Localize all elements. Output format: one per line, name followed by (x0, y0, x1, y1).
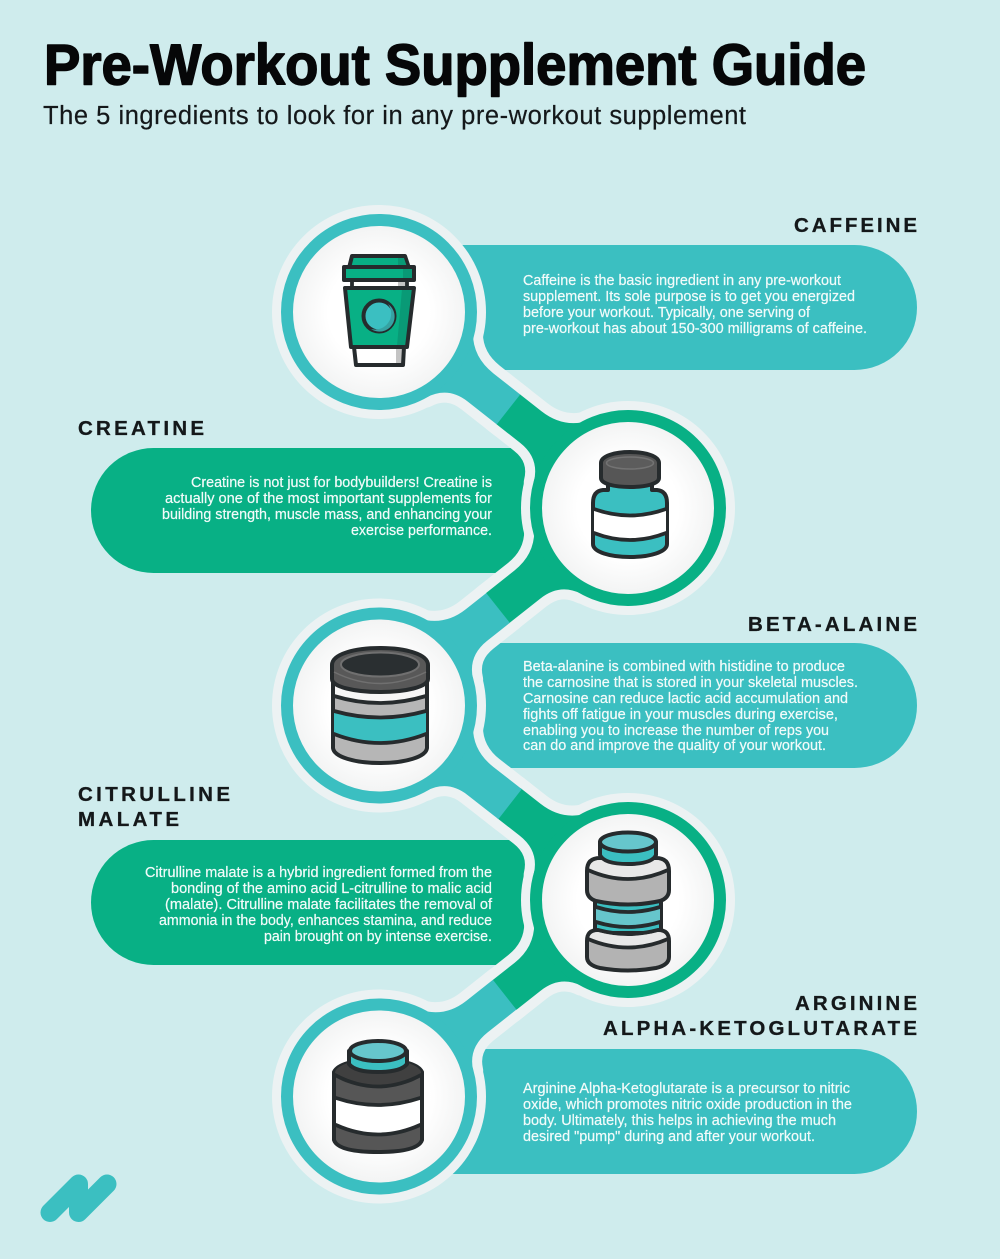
arginine heading (603, 992, 917, 1040)
creatine text: exercise performance. (351, 523, 492, 539)
arginine text: body. Ultimately, this helps in achieving the much (523, 1113, 836, 1129)
beta-alanine pill (360, 643, 917, 768)
creatine text (162, 475, 492, 539)
icon: tall stacked bottle (587, 832, 669, 970)
circle: beta-alanine (287, 614, 471, 798)
beta-alanine text: Beta-alanine is combined with histidine to produce (523, 659, 845, 675)
connector: beta-alanine to citrulline (410, 714, 597, 891)
beta-alanine text: fights off fatigue in your muscles during exercise, (523, 707, 838, 723)
beta-alanine text: can do and improve the quality of your workout. (523, 738, 826, 754)
caffeine text: Caffeine is the basic ingredient in any pre-workout (523, 273, 841, 289)
creatine text: building strength, muscle mass, and enhancing your (162, 507, 492, 523)
icon: capped jar (334, 1041, 422, 1152)
connector: citrulline to arginine (409, 909, 598, 1087)
citrulline malate heading (78, 783, 230, 831)
panel: caffeine (360, 214, 917, 370)
caffeine heading: CAFFEINE (794, 214, 917, 237)
citrulline malate text: ammonia in the body, enhances stamina, and reduce (159, 913, 492, 929)
arginine pill (360, 1049, 917, 1174)
caffeine text (523, 273, 867, 337)
caffeine text: supplement. Its sole purpose is to get you energized (523, 289, 855, 305)
citrulline malate heading: MALATE (78, 808, 179, 831)
icon: coffee cup (344, 256, 414, 365)
citrulline malate text: (malate). Citrulline malate facilitates the removal of (165, 897, 493, 913)
caffeine text: before your workout. Typically, one serving of (523, 305, 811, 321)
arginine text (523, 1081, 852, 1145)
arginine heading: ALPHA-KETOGLUTARATE (603, 1017, 917, 1040)
citrulline malate text: bonding of the amino acid L-citrulline to malic acid (171, 881, 492, 897)
citrulline malate text: Citrulline malate is a hybrid ingredient formed from the (145, 865, 492, 881)
connector halo (272, 205, 735, 1204)
connector: caffeine to creatine (409, 321, 598, 499)
citrulline malate text (145, 865, 493, 945)
beta-alanine text (523, 659, 858, 754)
arginine text: oxide, which promotes nitric oxide production in the (523, 1097, 852, 1113)
title: Pre-Workout Supplement Guide (44, 34, 866, 98)
beta-alanine text: Carnosine can reduce lactic acid accumulation and (523, 691, 848, 707)
panel: beta-alanine (360, 613, 917, 768)
subtitle: The 5 ingredients to look for in any pre-workout supplement (43, 102, 746, 130)
connector: creatine to beta-alanine (409, 517, 598, 696)
creatine text: Creatine is not just for bodybuilders! Creatine is (191, 475, 492, 491)
panel: arginine alpha-ketoglutarate (360, 992, 917, 1174)
creatine pill (91, 448, 600, 573)
circle: citrulline malate (536, 808, 720, 992)
circle: arginine (287, 1004, 471, 1188)
beta-alanine text: the carnosine that is stored in your skeletal muscles. (523, 675, 858, 691)
citrulline malate heading: CITRULLINE (78, 783, 230, 806)
beta-alanine heading: BETA-ALAINE (748, 613, 917, 636)
panel: creatine (78, 417, 600, 573)
citrulline malate text: pain brought on by intense exercise. (264, 929, 492, 945)
creatine text: actually one of the most important supplements for (165, 491, 492, 507)
creatine heading: CREATINE (78, 417, 204, 440)
circle: creatine (536, 416, 720, 600)
beta-alanine text: enabling you to increase the number of reps you (523, 723, 829, 739)
icon: wide tub (332, 648, 428, 763)
caffeine text: pre-workout has about 150-300 milligrams of caffeine. (523, 321, 867, 337)
panel: citrulline malate (78, 783, 600, 965)
arginine heading: ARGININE (795, 992, 917, 1015)
citrulline malate pill (91, 840, 600, 965)
arginine text: Arginine Alpha-Ketoglutarate is a precursor to nitric (523, 1081, 850, 1097)
icon: small bottle (593, 452, 667, 557)
caffeine pill (360, 245, 917, 370)
logo (50, 1184, 107, 1212)
arginine text: desired "pump" during and after your workout. (523, 1129, 815, 1145)
circle: caffeine (287, 220, 471, 404)
